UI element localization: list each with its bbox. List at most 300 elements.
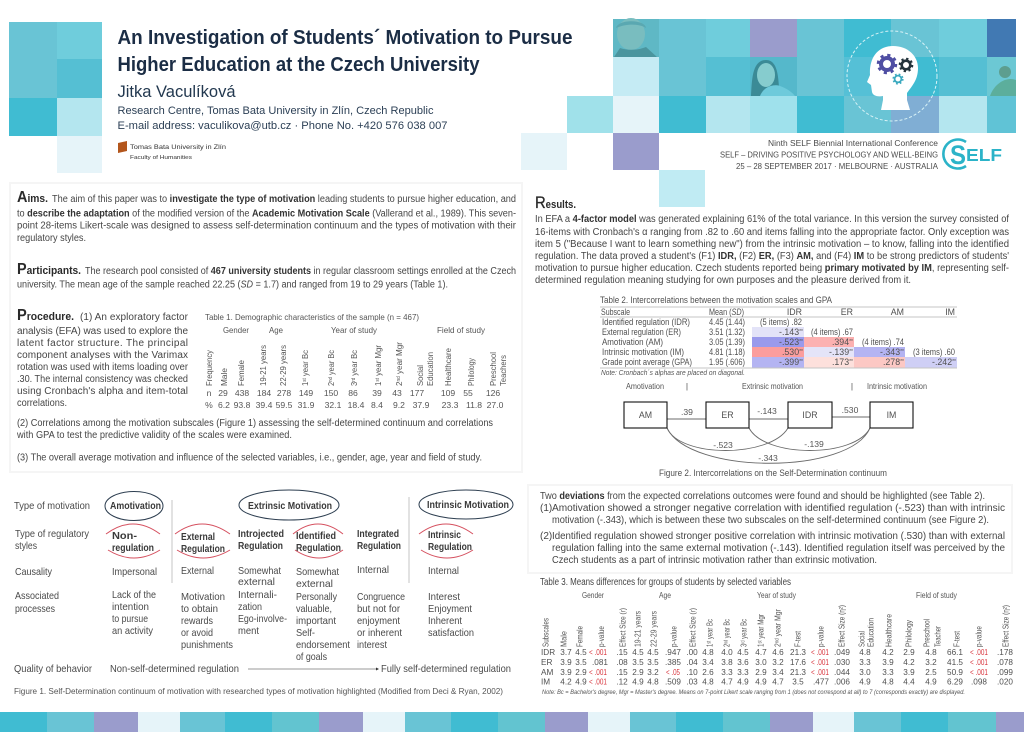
table 3 row ER: 41.5 (947, 658, 963, 667)
table 1: demographic characteristics: % (205, 400, 213, 410)
participants text: The research pool consisted of 467 university students in regular classroom settings enrolled at the Czech (85, 266, 516, 277)
associated processes row: punishments (181, 640, 233, 651)
table 2: intercorrelations: .530 (782, 347, 799, 357)
table 3 rotated column headers: F-test (794, 630, 802, 647)
dividers (172, 497, 409, 583)
table 1: demographic characteristics: 9.2 (393, 400, 405, 410)
table 1: demographic characteristics: 1 (300, 381, 310, 386)
table 3 rotated column headers: 22-29 years (650, 611, 658, 647)
table 3 row ER: 17.6 (790, 658, 806, 667)
table 3 row IDR: 4.5 (737, 648, 749, 657)
table 3 row ER: < .001 (811, 658, 829, 667)
regulatory styles: Identified (296, 531, 336, 542)
table 1: demographic characteristics: 37.9 (413, 400, 430, 410)
table 2: intercorrelations: 3.05 (1.39) (709, 337, 745, 347)
table 3 row AM: 3.3 (882, 668, 894, 677)
table 3 rotated column headers: Effect Size (η²) (838, 605, 846, 647)
table 3 row IDR: < .001 (970, 648, 988, 657)
table 3 rotated column headers: F-test (952, 630, 962, 647)
table 2: intercorrelations: Amotivation (AM) (602, 337, 663, 347)
table 3 row ER: 3.4 (702, 658, 714, 667)
table 3 row IDR: 2.9 (903, 648, 915, 657)
table 3 row IDR: 3.7 (560, 648, 572, 657)
table 1: demographic characteristics: year Mgr (394, 342, 404, 376)
panel: deviations: Czech students as a part of intrinsic motivation rather than extrinsic motivation. (552, 555, 877, 566)
table 2: intercorrelations: 1.95 (.606) (709, 357, 745, 367)
table 3 note: Note: Bc = Bachelor's degree, Mgr = Master's degree. Means on 7-point Likert scale ranging from 1 (does not correspond at all) to 7 (corresponds exactly) are displayed. (542, 689, 965, 696)
table 3 row IDR: .947 (665, 648, 681, 657)
table 1: demographic characteristics: 39.4 (256, 400, 273, 410)
header squares: left mosaic (9, 22, 102, 173)
associated processes row: Self- (296, 628, 315, 639)
table 3 row AM: .099 (997, 668, 1013, 677)
university logo: Tomas Bata University in Zlín (130, 144, 226, 151)
table 2: intercorrelations: Mean (SD) (709, 307, 744, 317)
associated processes row: Inherent (428, 616, 462, 627)
table 3 rotated column headers: Subscales (542, 618, 550, 647)
table 3 rotated column headers: nd (724, 640, 730, 644)
table 3 row AM: 2.9 (632, 668, 644, 677)
construct boxes: AM (639, 410, 652, 420)
table 3 rotated column headers: Social (858, 631, 866, 647)
table 3 rotated column headers: Philology (904, 620, 914, 647)
figure 1: self-determination continuum (14, 490, 513, 696)
table 1: demographic characteristics: Year of study (331, 325, 378, 335)
conference information: 25 – 28 SEPTEMBER 2017 · MELBOURNE · AUSTRALIA (736, 161, 938, 171)
table 2: intercorrelations: -.399 (779, 357, 799, 367)
table 3 row IM: IM (541, 678, 550, 686)
associated processes row: enjoyment (357, 616, 400, 627)
associated processes row: rewards (181, 616, 213, 627)
table 3 row IM: 4.7 (772, 678, 784, 686)
table 3 row IM (541, 678, 1013, 686)
table 1: demographic characteristics: 8.4 (371, 400, 383, 410)
table 2: intercorrelations: ** (799, 339, 803, 345)
table 3 row ER: .385 (665, 658, 681, 667)
table 3 row AM (541, 668, 1013, 677)
conference information (720, 138, 938, 171)
table 3 rotated column headers: Effect Size (r) (688, 608, 698, 647)
regulatory styles: Introjected (238, 529, 284, 540)
table 3 row IM: 4.9 (925, 678, 937, 686)
regulatory styles: regulation (112, 543, 154, 554)
table 1: demographic characteristics: 2 (326, 381, 336, 386)
table 1: demographic characteristics: 23.3 (442, 400, 459, 410)
row labels: Type of regulatory (15, 529, 90, 540)
table 2: intercorrelations: ** (900, 349, 904, 355)
table 3 row AM: 2.6 (702, 668, 714, 677)
associated processes row: Motivation (181, 592, 225, 603)
table 2: intercorrelations: Intrinsic motivation (IM) (602, 347, 684, 357)
table 3 row IDR: 4.8 (925, 648, 937, 657)
table 3 row IDR: 4.8 (859, 648, 871, 657)
table 3 rotated column headers: 2 (722, 643, 732, 647)
table 3 row IM: < .001 (589, 678, 607, 686)
motivation type ellipses: Amotivation (110, 501, 161, 512)
table 3 group headers: Gender (582, 590, 604, 600)
table 3 row IM: 4.8 (647, 678, 659, 686)
table 3 row ER: .078 (997, 658, 1013, 667)
connecting lines and curves (667, 417, 870, 463)
continuum labels: | (851, 381, 853, 391)
table 1: demographic characteristics: 93.8 (234, 400, 251, 410)
table 1: demographic characteristics: 109 (441, 388, 455, 398)
table 1: demographic characteristics: Field of study (437, 325, 486, 335)
table 1: demographic characteristics: Healthcare (443, 348, 453, 386)
correlation values: -.143 (757, 406, 777, 416)
title (118, 26, 572, 76)
associated processes row: interest (357, 640, 387, 651)
table 1: demographic characteristics: 150 (324, 388, 338, 398)
table 1: demographic characteristics: Gender (223, 325, 249, 335)
table 1: demographic characteristics: st (302, 378, 308, 382)
table 3 rotated column headers: p-value (974, 626, 984, 647)
associated processes row: of goals (296, 652, 327, 663)
table 3 row AM: < .001 (811, 668, 829, 677)
table 3 row IM: .006 (834, 678, 850, 686)
table 3 row AM: .15 (616, 668, 628, 677)
table 1: demographic characteristics: 43 (392, 388, 402, 398)
causality row: Internal (428, 566, 459, 577)
table 3 rotated column headers: year Bc (722, 619, 732, 640)
banner photo: person 2 (751, 60, 795, 96)
table 3 group headers (582, 590, 958, 600)
table 3 row ER (541, 658, 1013, 667)
procedure text: rotation was used with items loading over (17, 362, 189, 373)
table 2: intercorrelations: AM (891, 307, 904, 317)
table 2: intercorrelations: ** (849, 359, 853, 365)
table 2: intercorrelations: .394 (832, 337, 849, 347)
table 1: demographic characteristics: 29 (218, 388, 228, 398)
affiliation and contact: E-mail address: vaculikova@utb.cz · Phone No. +420 576 038 007 (118, 120, 448, 132)
construct boxes: ER (721, 410, 734, 420)
table 2: intercorrelations: ** (799, 359, 803, 365)
table 2: intercorrelations: -.139 (829, 347, 849, 357)
causality row: external (238, 577, 275, 588)
table 1: demographic characteristics: 278 (277, 388, 291, 398)
table 1: demographic characteristics: Social (415, 365, 425, 386)
table 3 row ER: .081 (592, 658, 608, 667)
table 1: demographic characteristics: 149 (299, 388, 313, 398)
causality row: External (181, 566, 214, 577)
associated processes row: Congruence (357, 592, 405, 603)
table 3 row IM: 4.8 (702, 678, 714, 686)
associated processes row: zation (238, 602, 262, 613)
participants text (17, 261, 516, 291)
table 3 row IDR: 4.5 (647, 648, 659, 657)
table 3 rotated column headers: st (758, 640, 764, 644)
aims text: regulatory styles. (17, 233, 86, 244)
table 1: demographic characteristics: 86 (348, 388, 358, 398)
table 3 row AM: 50.9 (947, 668, 963, 677)
table 3 row IDR: 4.5 (575, 648, 587, 657)
table 2: intercorrelations: Grade point average (GPA) (602, 357, 692, 367)
panel: deviations: (2) (540, 531, 552, 542)
table 1: demographic characteristics: year Bc (326, 349, 336, 377)
associated processes row: Personally (296, 592, 338, 603)
footer mosaic strip (0, 712, 1024, 732)
table 1: demographic characteristics: 59.5 (276, 400, 293, 410)
results text: determined regulation meaning studying for own purposes and the pleasure derived from it. (535, 275, 911, 286)
table 1: demographic characteristics: Frequency (204, 349, 214, 386)
associated processes row: Internali- (238, 590, 277, 601)
correlation values (681, 405, 859, 463)
table 2: intercorrelations: (4 items) .67 (811, 327, 853, 337)
table 1: demographic characteristics: 1 (373, 381, 383, 386)
regulatory styles: Non- (112, 531, 137, 542)
table 3 rotated column headers: year Bc (706, 619, 714, 641)
table 1: demographic characteristics: 6.2 (218, 400, 230, 410)
table 3 row AM: 3.9 (903, 668, 915, 677)
table 3 rotated column headers: p-value (597, 626, 606, 647)
continuum labels: Extrinsic motivation (742, 381, 803, 391)
table 3 row ER: 3.5 (632, 658, 644, 667)
associated processes row: Lack of the (112, 590, 156, 601)
table 2: intercorrelations: .278 (883, 357, 900, 367)
results heading: Results. (535, 193, 576, 212)
aims text: point 28-items Likert-scale was designed to assess self-determination continuum and the types of motivation with their (17, 221, 517, 232)
conference information: Ninth SELF Biennial International Conference (768, 138, 938, 148)
table 3 row ER: 3.8 (721, 658, 733, 667)
motivation type ellipses: Extrinsic Motivation (248, 501, 332, 512)
table 3 row ER: .08 (616, 658, 628, 667)
table 3 group headers: Age (659, 590, 671, 600)
table 2: intercorrelations: 3.51 (1.32) (709, 327, 745, 337)
panel: deviations (528, 485, 1012, 573)
table 2: intercorrelations: ** (799, 349, 803, 355)
procedure text: (1) An exploratory factor (80, 312, 189, 323)
procedure text: correlations. (17, 398, 67, 409)
continuum labels: Intrinsic motivation (867, 381, 927, 391)
table 3 rotated column headers: rd (740, 640, 746, 644)
table 3 row IM: .509 (665, 678, 681, 686)
regulatory styles: Regulation (296, 543, 341, 554)
quality of behavior arrow (110, 664, 511, 675)
table 3 row IM: 4.9 (755, 678, 767, 686)
table 3 rotated column headers: 2 (774, 643, 782, 647)
associated processes row: Enjoyment (428, 604, 472, 615)
university logo (118, 141, 226, 161)
table 3 row AM: 3.2 (647, 668, 659, 677)
table 3 row IM: .020 (997, 678, 1013, 686)
table 1: demographic characteristics: year Bc (300, 349, 310, 378)
associated processes row: an activity (112, 626, 154, 637)
causality row: Internal (357, 565, 389, 576)
table 1: demographic characteristics: nd (396, 376, 402, 381)
table 3 row AM: < .001 (589, 668, 607, 677)
table 3 row ER: 3.2 (772, 658, 784, 667)
procedure text: analysis (EFA) was used to explore the (17, 326, 188, 337)
table 2: intercorrelations: (3 items) .60 (913, 347, 955, 357)
motivation type ellipses: Intrinsic Motivation (427, 500, 509, 511)
procedure text (16, 307, 493, 464)
table 3 row IDR: 4.0 (721, 648, 733, 657)
causality row: Impersonal (112, 567, 157, 578)
table 1: demographic characteristics: 32.1 (325, 400, 342, 410)
procedure text: Procedure. (17, 307, 74, 324)
table 1: demographic characteristics: 2 (394, 381, 404, 386)
table 1: demographic characteristics: 184 (257, 388, 271, 398)
row labels: Quality of behavior (14, 664, 93, 675)
table 1: demographic characteristics: nd (328, 377, 334, 382)
banner photo: person 1 (614, 18, 657, 57)
figure 1 caption: Figure 1. Self-Determination continuum of motivation with researched types of motivation highlighted (Modified from Deci & Ryan, 2002) (14, 687, 503, 696)
associated processes row: but not for (357, 604, 401, 615)
affiliation and contact (118, 105, 448, 132)
table 3 row ER: 3.0 (755, 658, 767, 667)
table 2: intercorrelations: Subscale (601, 307, 630, 317)
table 3 row IDR: .00 (686, 648, 698, 657)
table 2: intercorrelations: ** (849, 339, 853, 345)
construct boxes: IDR (802, 410, 818, 420)
table 2: intercorrelations: ER (841, 307, 853, 317)
conference information: SELF – DRIVING POSITIVE PSYCHOLOGY AND WELL-BEING (720, 150, 938, 160)
table 1: demographic characteristics: Male (219, 368, 229, 386)
table 3 row IM: 4.2 (560, 678, 572, 686)
table 3 rotated column headers: Education (866, 618, 876, 647)
table 2: intercorrelations: Table 2. Intercorrelations between the motivation scales and GPA (600, 295, 832, 305)
table 3 rotated column headers: Effect Size (r) (618, 608, 628, 647)
results text: motivation to pursue higher education. Czech students reported being primary motivated by IM, representing self- (535, 263, 1009, 274)
panel: deviations: Identified regulation showed stronger positive correlation with intrinsic motivation (.530) than with external (552, 531, 1005, 542)
table 1: demographic characteristics (204, 312, 508, 410)
table 3 row AM: 3.3 (737, 668, 749, 677)
procedure text: using Cronbach's alpha and item-total (17, 386, 188, 397)
table 3 row AM: 3.4 (772, 668, 784, 677)
table 3 row ER: .04 (686, 658, 698, 667)
correlation values: -.523 (713, 440, 733, 450)
associated processes row: ment (238, 626, 259, 637)
table 3 row AM: 21.3 (790, 668, 806, 677)
associated processes row: Ego-involve- (238, 614, 287, 625)
SELF logo: S (950, 140, 966, 170)
regulatory styles (112, 529, 472, 555)
table 3 row IDR: < .001 (811, 648, 829, 657)
table 3 row IDR: 21.3 (790, 648, 806, 657)
table 3 rotated column headers: year Mgr (774, 609, 782, 638)
causality row: external (296, 579, 333, 590)
title: Higher Education at the Czech University (118, 53, 480, 76)
table 1: demographic characteristics: Female (236, 360, 246, 386)
table 3 row IM: 4.9 (737, 678, 749, 686)
table 1: demographic characteristics: year Mgr (373, 345, 383, 378)
table 3 row IM: .03 (686, 678, 698, 686)
row labels: Causality (15, 567, 53, 578)
table 3 row IM: .12 (616, 678, 628, 686)
table 3 row IDR: 4.8 (702, 648, 714, 657)
table 1: demographic characteristics: 31.9 (298, 400, 315, 410)
table 3 row IDR: 4.5 (632, 648, 644, 657)
procedure text: with GPA to test the predictive validity of the scales were examined. (16, 430, 292, 441)
table 3 rotated column headers: st (706, 640, 712, 644)
table 3 rotated column headers: year Mgr (756, 614, 766, 640)
associated processes row: or inherent (357, 628, 402, 639)
table 1: demographic characteristics: 55 (463, 388, 473, 398)
table 1: demographic characteristics: n (207, 388, 212, 398)
table 3 row ER: 3.3 (859, 658, 871, 667)
table 2: intercorrelations: ** (900, 359, 904, 365)
table 1: demographic characteristics: 18.4 (348, 400, 365, 410)
author: Jitka Vaculíková (118, 83, 236, 101)
correlation values: -.343 (758, 453, 778, 463)
table 3 row IDR: 4.6 (772, 648, 784, 657)
table 3 rotated column headers: Effect Size (η²) (1002, 605, 1010, 647)
procedure text: component analyses with the Varimax (17, 350, 188, 361)
table 3 row ER: 3.2 (925, 658, 937, 667)
table 2: intercorrelations: -.343 (880, 347, 900, 357)
table 1: demographic characteristics: 39 (372, 388, 382, 398)
table 3 row AM: 3.9 (560, 668, 572, 677)
results text: In EFA a 4-factor model was generated explaining 61% of the total variance. In this version the survey consisted of (535, 214, 1009, 225)
affiliation and contact: Research Centre, Tomas Bata University in Zlín, Czech Republic (118, 105, 434, 117)
table 1: demographic characteristics: Teachers (498, 355, 508, 386)
table 3 rotated column headers: nd (774, 638, 780, 643)
construct boxes (624, 402, 913, 428)
title: An Investigation of Students´ Motivation to Pursue (118, 26, 572, 49)
procedure text: .30. The internal consistency was checked (17, 374, 188, 385)
table 1: demographic characteristics: rd (351, 378, 357, 382)
regulatory styles: Regulation (238, 541, 283, 552)
table 2: intercorrelations: External regulation (ER) (602, 327, 681, 337)
participants text: Participants. (17, 261, 81, 278)
table 3 rotated column headers: Teacher (934, 626, 942, 647)
panel: deviations: (1) (540, 503, 552, 514)
table 3 row AM: AM (541, 668, 553, 677)
aims text: The aim of this paper was to investigate the type of motivation leading students to pursue higher education, and (52, 194, 516, 205)
SELF logo (943, 139, 1002, 170)
table 3 row AM: < .05 (666, 668, 680, 677)
table 2: intercorrelations: -.523 (779, 337, 799, 347)
table 3 row IDR: 4.7 (755, 648, 767, 657)
associated processes row: to obtain (181, 604, 218, 615)
continuum labels: | (686, 381, 688, 391)
table 3 row IDR: < .001 (589, 648, 607, 657)
table 3 row IM: 4.7 (721, 678, 733, 686)
table 3 rotated column headers: Male (560, 630, 568, 647)
table 3 row ER: 3.5 (575, 658, 587, 667)
associated processes row: or avoid (181, 628, 213, 639)
panel: deviations: Amotivation showed a stronger negative correlation with identified regulation (-.523) than with intrinsic (552, 503, 1005, 514)
table 3 row IDR: 66.1 (947, 648, 963, 657)
table 3 row IM: 4.9 (859, 678, 871, 686)
panel: deviations: regulation falling into the same external motivation (-.143). Identified regulation itself was perceived by the (552, 543, 1005, 554)
table 3 rotated column headers: Healthcare (884, 614, 894, 647)
table 3 row ER: 3.6 (737, 658, 749, 667)
table 1: demographic characteristics: Table 1. Demographic characteristics of the sample (n = 467) (205, 312, 419, 322)
table 2: intercorrelations: (4 items) .74 (862, 337, 904, 347)
table 3 row AM: .044 (834, 668, 850, 677)
header banner mosaic (521, 19, 1016, 207)
table 3 row IM: .098 (971, 678, 987, 686)
table 3 row ER: 4.2 (903, 658, 915, 667)
associated processes row: Interest (428, 592, 460, 603)
results text: regulation. The data proved a student's (F1) IDR, (F2) ER, (F3) AM, and (F4) IM to be strong predictors of students' (535, 251, 1009, 262)
table 1: demographic characteristics: Age (269, 325, 283, 335)
table 3 row IM: 4.9 (575, 678, 587, 686)
row labels (14, 501, 93, 675)
university logo: Faculty of Humanities (130, 155, 192, 161)
regulatory styles: Regulation (357, 541, 401, 552)
table 3 row IDR: .049 (834, 648, 850, 657)
SELF logo: ELF (966, 145, 1002, 165)
causality row: Somewhat (238, 566, 281, 577)
table 3 row IM: 3.5 (792, 678, 804, 686)
table 1: demographic characteristics: Philology (466, 357, 476, 386)
table 2: intercorrelations: .173 (832, 357, 849, 367)
table 2: intercorrelations: ** (952, 359, 956, 365)
table 1: demographic characteristics: 177 (410, 388, 424, 398)
table 3 row ER: 3.9 (560, 658, 572, 667)
